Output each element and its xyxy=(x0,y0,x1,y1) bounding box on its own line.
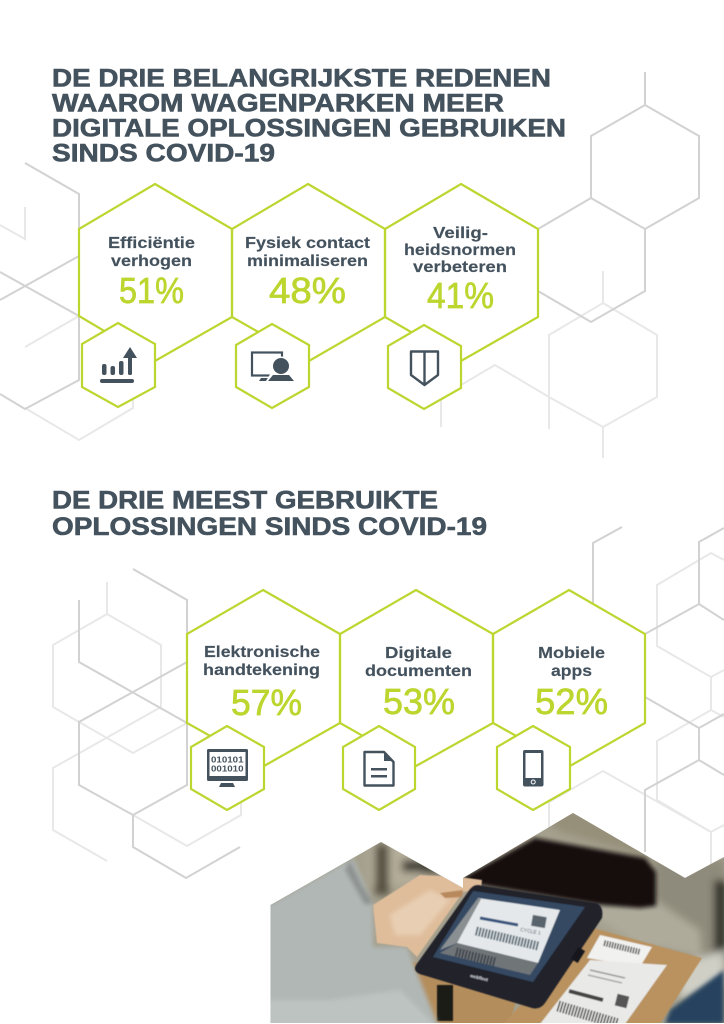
heading: reasons: DIGITALE OPLOSSINGEN GEBRUIKEN xyxy=(52,114,566,142)
card: fysiek contact minimaliseren 48%: Fysiek contact xyxy=(245,235,371,252)
percentage 51%: 51% xyxy=(119,270,184,311)
background hexagon pattern, top left xyxy=(0,163,133,440)
panel: reasons xyxy=(52,64,566,409)
heading: solutions: DE DRIE MEEST GEBRUIKTE xyxy=(52,486,438,514)
card: efficiëntie verhogen 51% xyxy=(79,184,232,407)
card: veiligheidsnormen verbeteren 41%: heidsnormen xyxy=(404,242,516,259)
percentage 48%: 48% xyxy=(269,270,346,311)
background hexagon pattern, lower left xyxy=(53,569,241,878)
icon: shield xyxy=(411,352,438,385)
card: elektronische handtekening 57% xyxy=(187,590,340,810)
parcel with shipping labels xyxy=(503,928,702,1024)
card: fysiek contact minimaliseren 48%: minimaliseren xyxy=(247,253,368,270)
icon: smartphone xyxy=(523,750,544,786)
card: mobiele apps 52%: Mobiele xyxy=(538,645,605,662)
icon: monitor with person xyxy=(252,352,296,381)
tablet: CYCLE 1 xyxy=(520,927,541,937)
card: elektronische handtekening 57%: handtekening xyxy=(203,662,320,679)
card: digitale documenten 53% xyxy=(340,590,493,810)
forearm sleeve xyxy=(268,858,440,1024)
background hexagon pattern, lower right xyxy=(549,527,724,865)
percentage 53%: 53% xyxy=(383,681,455,722)
card: veiligheidsnormen verbeteren 41%: verbeteren xyxy=(413,259,507,276)
percentage 52%: 52% xyxy=(535,681,608,722)
background hexagon pattern, top right xyxy=(441,72,699,458)
percentage 57%: 57% xyxy=(231,682,302,723)
panel: solutions xyxy=(52,486,645,810)
percentage 41%: 41% xyxy=(427,275,494,316)
card: elektronische handtekening 57%: Elektronische xyxy=(204,644,320,661)
card: veiligheidsnormen verbeteren 41%: Veilig- xyxy=(433,225,488,242)
heading: reasons: DE DRIE BELANGRIJKSTE REDENEN xyxy=(52,64,551,92)
heading: reasons xyxy=(52,64,566,168)
icon: monitor with binary code: 010101 xyxy=(211,754,244,764)
card: digitale documenten 53%: documenten xyxy=(365,663,472,680)
heading: solutions: OPLOSSINGEN SINDS COVID-19 xyxy=(52,513,487,541)
heading: reasons: SINDS COVID-19 xyxy=(52,140,275,168)
card: mobiele apps 52% xyxy=(493,590,645,810)
tablet: webfleet xyxy=(469,973,489,982)
hand xyxy=(373,875,482,957)
icon: document xyxy=(364,751,394,786)
heading: solutions xyxy=(52,486,487,541)
card: digitale documenten 53%: Digitale xyxy=(385,645,452,662)
card: fysiek contact minimaliseren 48% xyxy=(232,184,385,408)
blue carton, lower right xyxy=(665,970,724,1024)
blurred warehouse background xyxy=(370,810,724,1000)
heading: reasons: WAAROM WAGENPARKEN MEER xyxy=(52,90,504,118)
card: efficiëntie verhogen 51%: Efficiëntie xyxy=(108,235,195,252)
icon: growth chart xyxy=(100,347,137,383)
dark printer band xyxy=(455,838,656,908)
card: mobiele apps 52%: apps xyxy=(551,663,592,680)
photo: hands holding rugged tablet above a labelled parcel xyxy=(268,810,724,1024)
tablet xyxy=(415,885,602,1008)
card: veiligheidsnormen verbeteren 41% xyxy=(385,184,538,409)
icon: monitor with binary code xyxy=(207,749,248,787)
card: efficiëntie verhogen 51%: verhogen xyxy=(111,253,192,270)
icon: monitor with binary code: 001010 xyxy=(211,764,244,774)
lower cardboard box xyxy=(411,962,516,1023)
